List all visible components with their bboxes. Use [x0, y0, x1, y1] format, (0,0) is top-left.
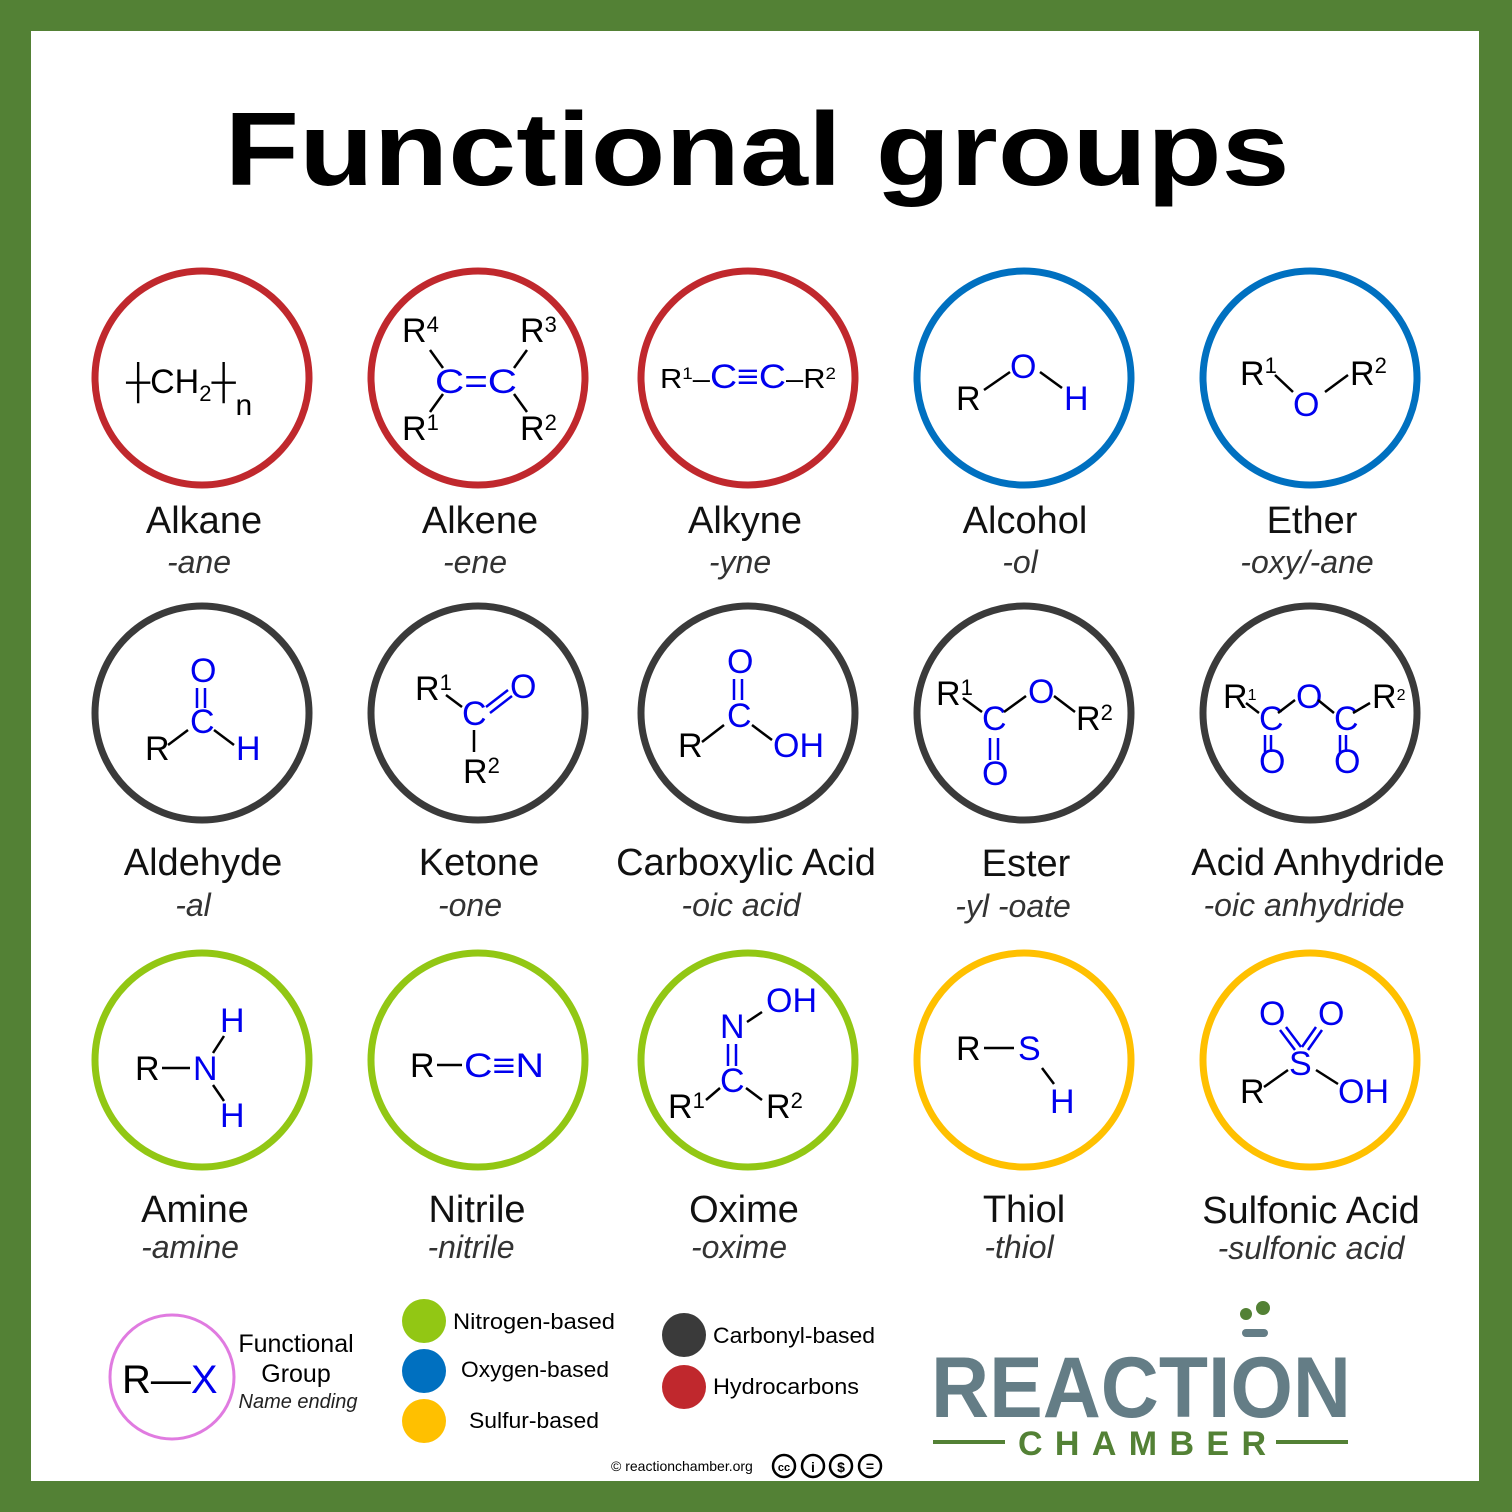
panel: nitrile: C≡N [464, 1047, 544, 1085]
legend: functional group key: Name ending [239, 1391, 357, 1413]
panel: sulfonic acid: S [1289, 1045, 1312, 1083]
panel: acid anhydride: O [1259, 743, 1285, 781]
panel: ketone [371, 606, 585, 923]
panel: alkene: 3 [545, 312, 557, 337]
panel: aldehyde: -al [175, 887, 212, 923]
panel: oxime: 1 [693, 1088, 705, 1113]
panel: sulfonic acid: -sulfonic acid [1218, 1230, 1406, 1266]
panel: ketone: -one [438, 887, 502, 923]
panel: nitrile: R [410, 1047, 435, 1085]
panel: ketone: R [415, 670, 440, 708]
panel: amine: H [220, 1097, 245, 1135]
panel: oxime: R [668, 1088, 693, 1126]
panel: aldehyde: O [190, 652, 216, 690]
panel: ether: Ether [1267, 500, 1358, 542]
panel: oxime: N [720, 1008, 745, 1046]
panel: acid anhydride [1191, 606, 1445, 923]
panel: alkene: 1 [427, 410, 439, 435]
panel: aldehyde: Aldehyde [124, 842, 282, 884]
panel: ester [917, 606, 1131, 924]
legend: colour key: Hydrocarbons [713, 1374, 859, 1399]
panel: aldehyde: C [190, 703, 215, 741]
panel: sulfonic acid: O [1318, 995, 1344, 1033]
copyright and licence icons [611, 1455, 881, 1477]
legend: functional group key: Functional [238, 1330, 354, 1358]
panel: oxime: OH [766, 982, 817, 1020]
panel: amine [95, 953, 309, 1265]
panel: alcohol: O [1010, 348, 1036, 386]
panel: acid anhydride: 2 [1397, 687, 1406, 704]
panel: ether: R [1350, 355, 1375, 393]
panel: aldehyde: R [145, 730, 170, 768]
panel: alkane: Alkane [146, 500, 262, 542]
panel: alcohol: -ol [1002, 544, 1039, 580]
panel: ketone: C [462, 695, 487, 733]
panel: alkyne: 2 [826, 364, 836, 383]
panel: ester: O [982, 755, 1008, 793]
panel: aldehyde [95, 606, 309, 923]
legend: colour key: Nitrogen-based [453, 1309, 615, 1334]
panel: carboxylic acid: C [727, 697, 752, 735]
panel: ether: -oxy/-ane [1240, 544, 1374, 580]
panel: alkane: -ane [167, 544, 231, 580]
logo: reaction chamber [931, 1301, 1351, 1463]
panel: ketone: R [463, 753, 488, 791]
title: Functional groups [224, 92, 1290, 208]
panel: ester: C [982, 700, 1007, 738]
panel: alkyne: 1 [682, 364, 693, 383]
panel: alkyne [641, 271, 855, 580]
panel: sulfonic acid: O [1259, 995, 1285, 1033]
panel: alkyne: C≡C –R [710, 358, 822, 396]
panel: alkane: ┼CH [126, 363, 199, 401]
panel: ester: Ester [982, 843, 1071, 885]
logo: reaction chamber: REACTION [931, 1340, 1351, 1436]
panel: oxime: R [766, 1088, 791, 1126]
legend: functional group key: R—X [122, 1358, 218, 1402]
copyright and licence icons: = [866, 1458, 874, 1474]
panel: carboxylic acid [616, 606, 876, 923]
panel: oxime: Oxime [689, 1189, 799, 1231]
legend: functional group key [110, 1315, 357, 1439]
logo: reaction chamber: CHAMBER [1018, 1425, 1266, 1463]
panel: carboxylic acid: -oic acid [681, 887, 802, 923]
panel: oxime: C [720, 1062, 745, 1100]
panel: carboxylic acid: O [727, 643, 753, 681]
panel: alcohol: Alcohol [963, 500, 1087, 542]
panel: alkene: C=C [435, 363, 517, 401]
panel: alkene: R [520, 312, 545, 350]
panel: acid anhydride: -oic anhydride [1204, 887, 1404, 923]
legend: colour key: Sulfur-based [469, 1408, 599, 1433]
panel: oxime: -oxime [691, 1229, 787, 1265]
panel: ester: 2 [1101, 700, 1113, 725]
panel: alkene: R [402, 410, 427, 448]
panel: alkyne: R [660, 363, 680, 394]
panel: ester: -yl -oate [955, 888, 1071, 924]
panel: sulfonic acid: OH [1338, 1073, 1389, 1111]
legend: functional group key: Group [261, 1360, 331, 1388]
panel: alkane: ┼ [210, 362, 236, 404]
panel: ester: O [1028, 673, 1054, 711]
legend: colour key [402, 1299, 875, 1443]
panel: alkyne: -yne [709, 544, 771, 580]
panel: sulfonic acid [1202, 953, 1420, 1266]
panel: thiol: R [956, 1030, 981, 1068]
panel: thiol [917, 953, 1131, 1265]
panel: amine: R [135, 1050, 160, 1088]
panel: alkene [371, 271, 585, 580]
panel: acid anhydride: R [1223, 678, 1248, 716]
panel: alkene: -ene [443, 544, 507, 580]
panel: ester: R [1076, 700, 1101, 738]
panel: amine: Amine [141, 1189, 249, 1231]
panel: ester: 1 [961, 675, 973, 700]
panel: acid anhydride: O [1296, 678, 1322, 716]
panel: ester: R [936, 675, 961, 713]
panel: ether: 1 [1265, 353, 1277, 378]
panel: oxime [641, 953, 855, 1265]
panel: sulfonic acid: Sulfonic Acid [1202, 1190, 1420, 1232]
panel: aldehyde: H [236, 730, 261, 768]
panel: ketone: 2 [488, 753, 500, 778]
panel: amine: -amine [141, 1229, 239, 1265]
panel: amine: N [193, 1050, 218, 1088]
panel: acid anhydride: R [1372, 678, 1397, 716]
panel: amine: H [220, 1002, 245, 1040]
panel: alcohol [917, 271, 1131, 580]
panel: ketone: O [510, 668, 536, 706]
panel: alkene: R [520, 410, 545, 448]
panel: nitrile [371, 953, 585, 1265]
panel: alcohol: H [1064, 380, 1089, 418]
panel: alcohol: R [956, 380, 981, 418]
panel: carboxylic acid: Carboxylic Acid [616, 842, 876, 884]
panel: alkene: 4 [427, 312, 439, 337]
panel: thiol: H [1050, 1083, 1075, 1121]
panel: acid anhydride: C [1259, 700, 1284, 738]
copyright and licence icons: $ [837, 1459, 845, 1475]
panel: ether: 2 [1375, 353, 1387, 378]
panel: ether: O [1293, 386, 1319, 424]
panel: ether: R [1240, 355, 1265, 393]
copyright and licence icons: i [811, 1459, 815, 1475]
panel: nitrile: Nitrile [428, 1189, 526, 1231]
panel: alkane [95, 271, 309, 580]
panel: thiol: Thiol [983, 1189, 1065, 1231]
panel: alkyne: – [693, 363, 710, 394]
panel: alkene: Alkene [422, 500, 538, 542]
panel: alkane: 2 [199, 381, 211, 406]
panel: oxime: 2 [791, 1088, 803, 1113]
panel: thiol: -thiol [984, 1229, 1055, 1265]
panel: nitrile: -nitrile [427, 1229, 515, 1265]
panel: acid anhydride: O [1334, 743, 1360, 781]
panel: ketone: 1 [440, 670, 452, 695]
panel: acid anhydride: 1 [1248, 687, 1257, 704]
legend: colour key: Oxygen-based [461, 1357, 609, 1382]
panel: alkene: R [402, 312, 427, 350]
panel: sulfonic acid: R [1240, 1073, 1265, 1111]
panel: thiol: S [1018, 1030, 1041, 1068]
panel: alkane: n [236, 389, 252, 422]
panel: ether [1203, 271, 1417, 580]
copyright and licence icons: © reactionchamber.org [611, 1458, 753, 1474]
panel: ketone: Ketone [419, 842, 539, 884]
panel: alkene: 2 [545, 410, 557, 435]
panel: acid anhydride: C [1334, 700, 1359, 738]
panel: carboxylic acid: OH [773, 727, 824, 765]
panel: carboxylic acid: R [678, 727, 703, 765]
legend: colour key: Carbonyl-based [713, 1323, 875, 1348]
panel: acid anhydride: Acid Anhydride [1191, 842, 1445, 884]
copyright and licence icons: cc [778, 1462, 790, 1474]
panel: alkyne: Alkyne [688, 500, 802, 542]
